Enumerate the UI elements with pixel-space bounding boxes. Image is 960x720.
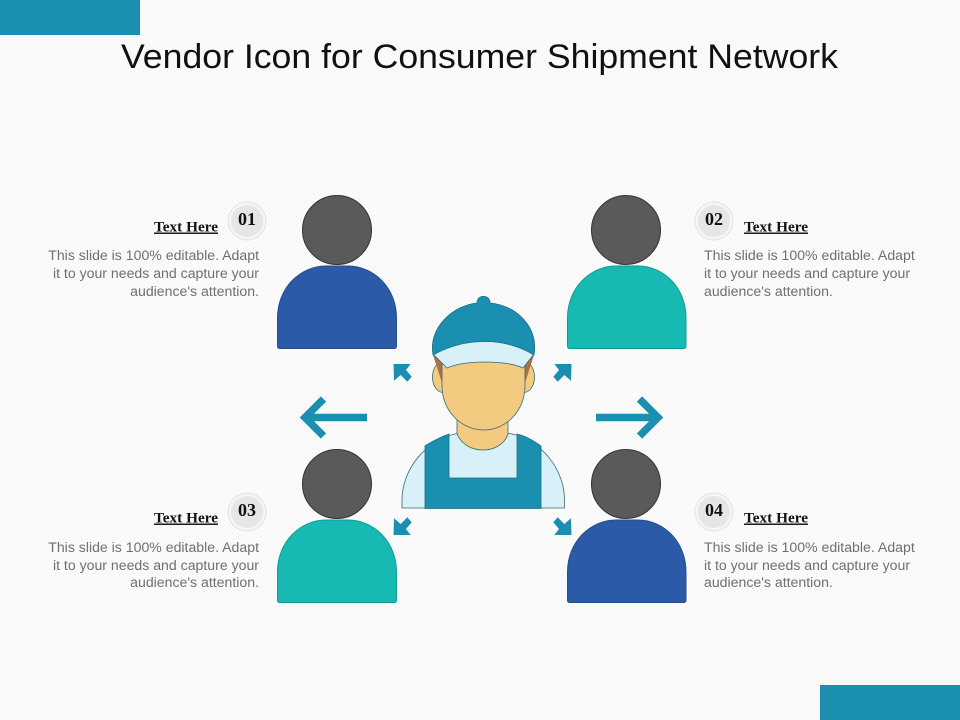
- arrow: small up-right: [553, 364, 572, 382]
- arrow: small down-left: [394, 517, 412, 535]
- arrow: large left: [305, 399, 367, 436]
- icon: cap dome: [432, 296, 535, 355]
- number badge 04: 04: [705, 500, 723, 520]
- heading 04: Text Here: [744, 510, 809, 526]
- body text 04: audience's attention.: [704, 574, 833, 590]
- body text 01: This slide is 100% editable. Adapt: [48, 247, 259, 263]
- number badge 02: 02: [705, 209, 723, 229]
- body text 03: it to your needs and capture your: [53, 557, 259, 573]
- person 3: bottom left teal: [278, 450, 396, 602]
- arrow: large right: [596, 399, 658, 436]
- title: Vendor Icon for Consumer Shipment Network: [121, 38, 839, 76]
- body text 01: it to your needs and capture your: [53, 265, 259, 281]
- icon: ears: [432, 362, 534, 392]
- icon: neck: [457, 415, 508, 450]
- person 4: bottom right blue: [568, 450, 686, 602]
- number badge 01: [228, 202, 266, 240]
- heading 02: Text Here: [744, 220, 809, 236]
- number badge 01: 01: [238, 209, 256, 229]
- heading 03: Text Here: [154, 510, 219, 526]
- icon: cap brim: [433, 341, 534, 368]
- bottom right accent bar: [820, 685, 960, 720]
- callout 04: [695, 493, 915, 590]
- callout 02: [695, 202, 915, 299]
- number badge 04: [695, 493, 733, 531]
- callout 01: [48, 202, 266, 299]
- icon: face: [442, 362, 525, 430]
- icon: shirt: [402, 434, 564, 508]
- icon: overalls: [425, 434, 541, 508]
- person 2: top right teal: [568, 196, 686, 348]
- body text 04: it to your needs and capture your: [704, 557, 910, 573]
- number badge 03: [228, 493, 266, 531]
- body text 02: it to your needs and capture your: [704, 265, 910, 281]
- body text 02: audience's attention.: [704, 283, 833, 299]
- central vendor icon: [402, 296, 564, 508]
- heading 01: Text Here: [154, 220, 219, 236]
- number badge 03: 03: [238, 500, 256, 520]
- body text 01: audience's attention.: [130, 283, 259, 299]
- body text 03: This slide is 100% editable. Adapt: [48, 539, 259, 555]
- arrow: small up-left: [394, 364, 412, 382]
- body text 04: This slide is 100% editable. Adapt: [704, 539, 915, 555]
- callout 03: [48, 493, 266, 590]
- person 1: top left blue: [278, 196, 396, 348]
- icon: hair: [433, 355, 534, 386]
- number badge 02: [695, 202, 733, 240]
- arrow: small down-right: [553, 517, 572, 535]
- body text 02: This slide is 100% editable. Adapt: [704, 247, 915, 263]
- body text 03: audience's attention.: [130, 574, 259, 590]
- top left accent bar: [0, 0, 140, 35]
